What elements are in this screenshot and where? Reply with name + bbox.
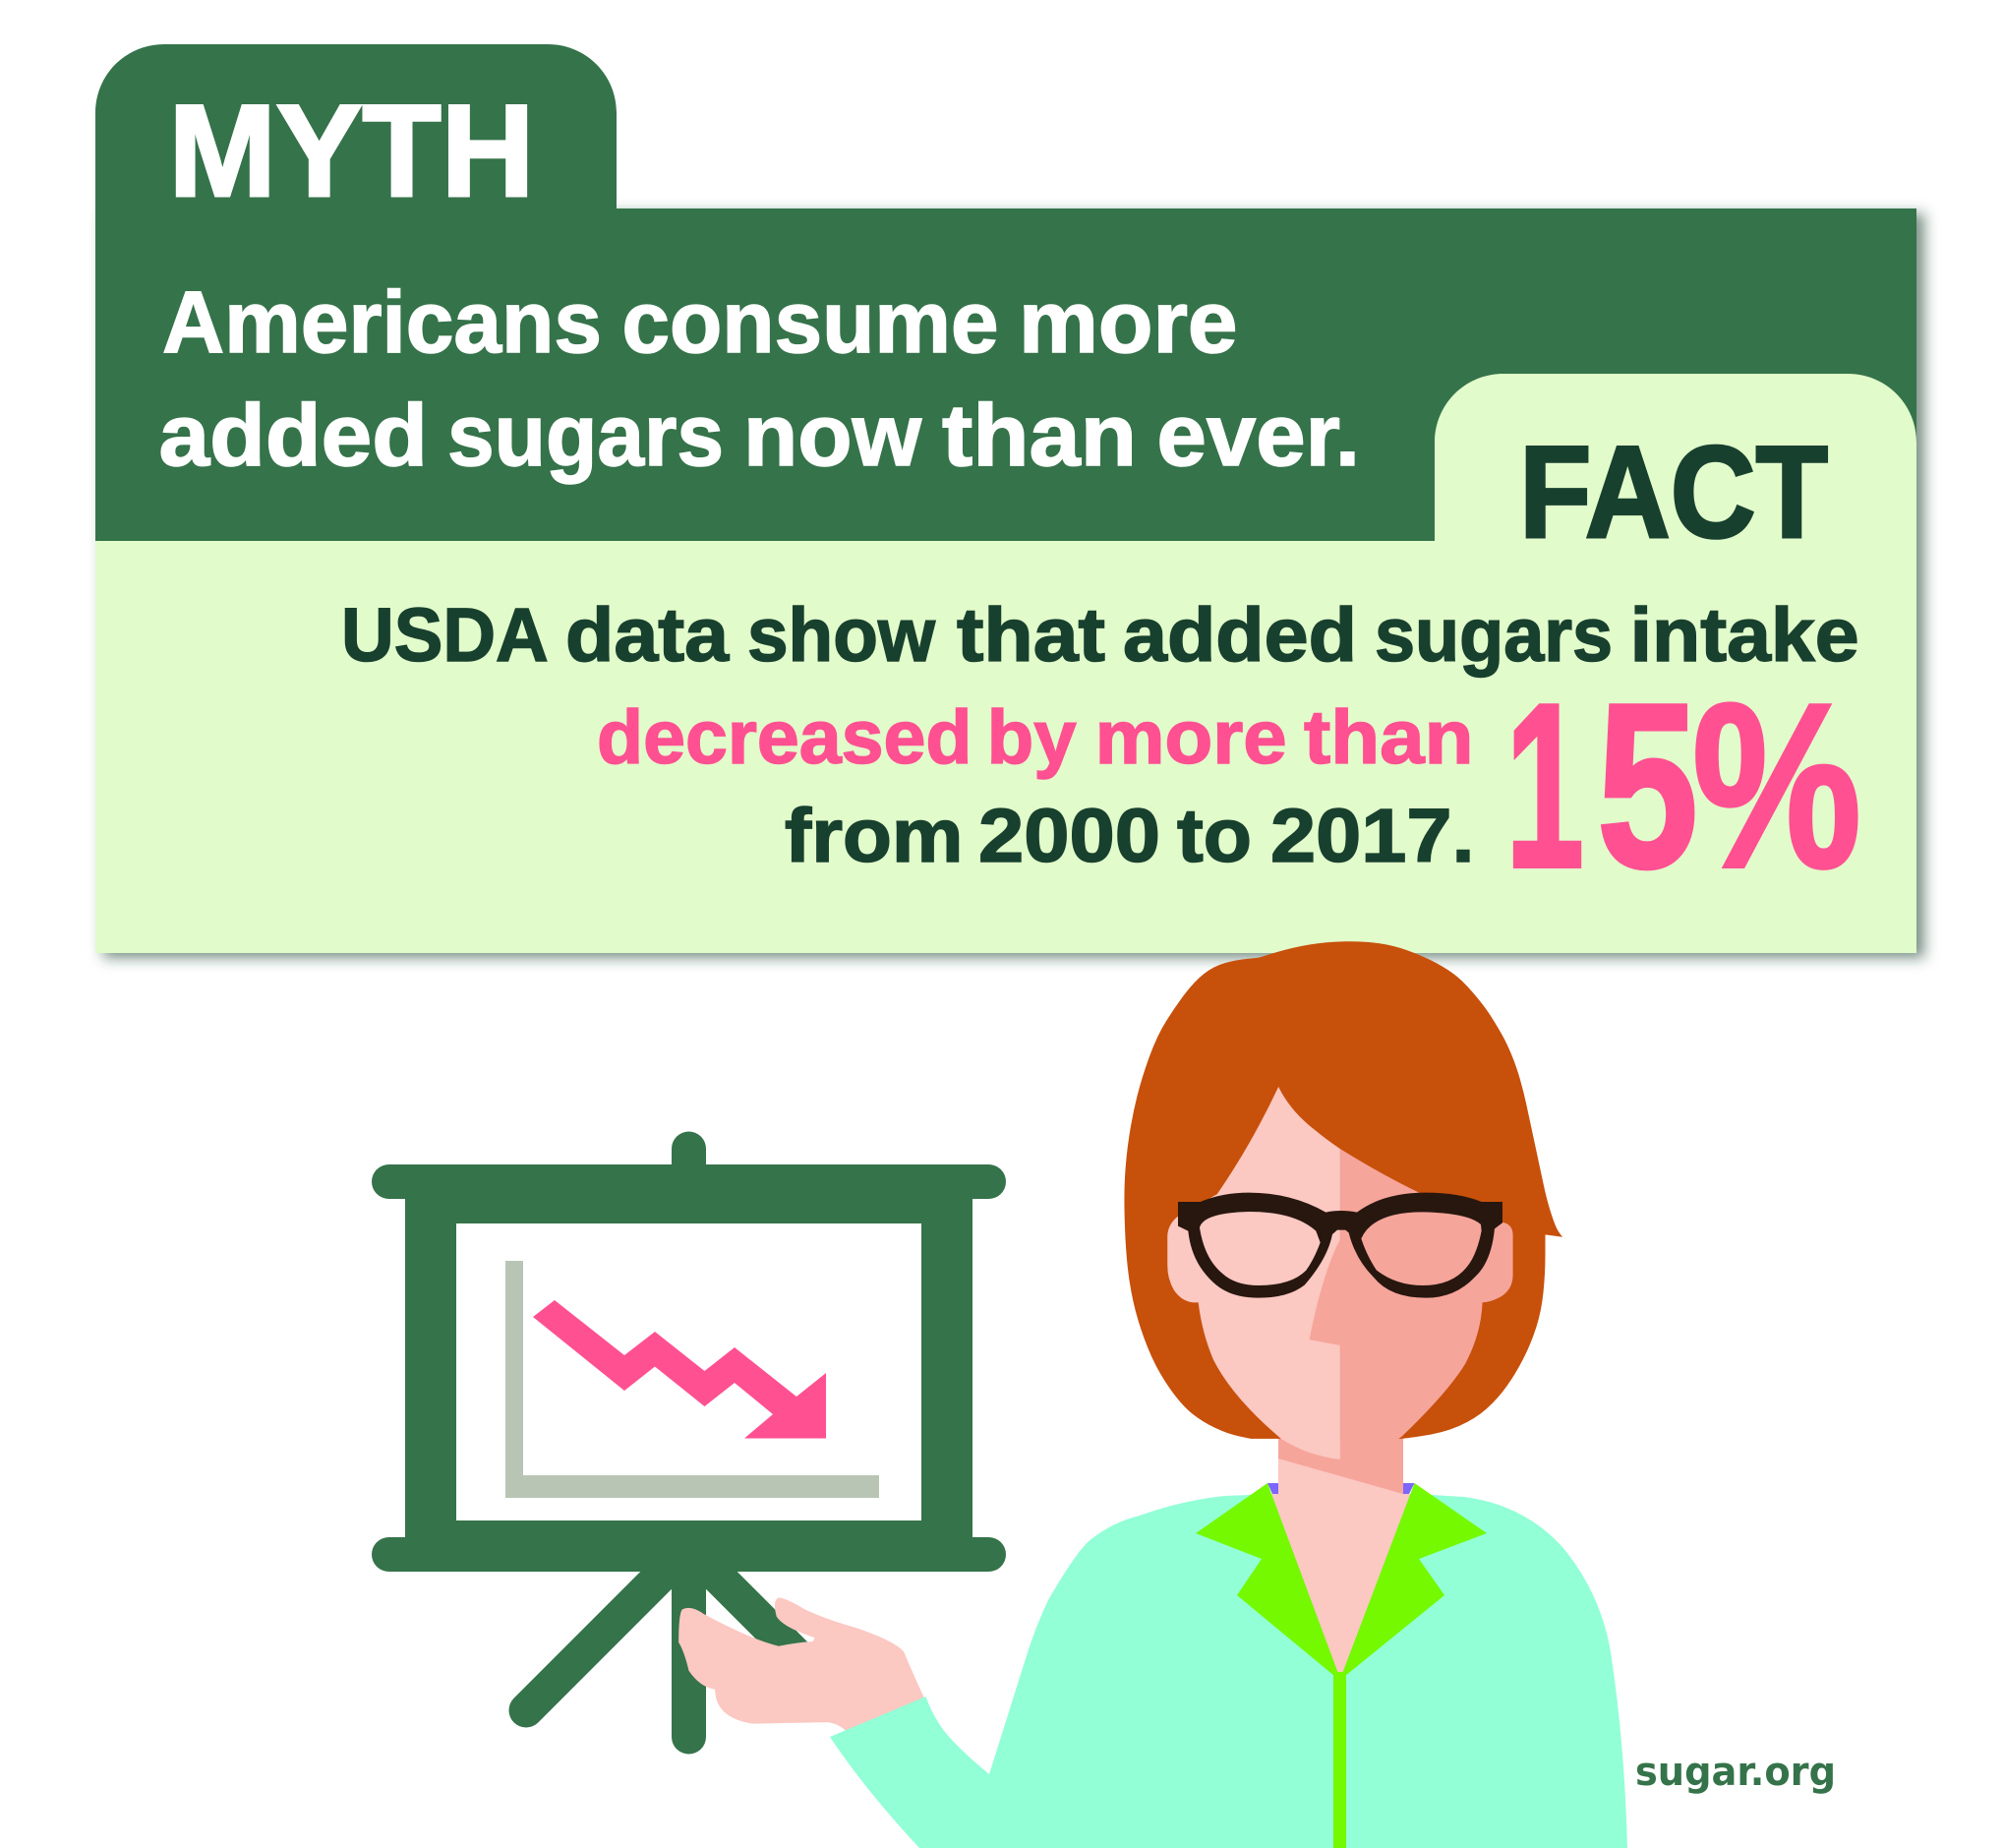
fact statement: data [565,593,730,678]
lapels [1196,1483,1487,1679]
myth statement: sugars [447,386,724,484]
panel shadow base [95,209,1916,953]
fact statement: than [1304,695,1473,780]
fact statement [341,593,1859,878]
head [1124,941,1562,1460]
face light side [1167,1087,1340,1460]
myth statement: more [1019,272,1237,371]
myth statement: now [743,386,922,484]
heading: myth: MYTH [169,79,535,224]
panel: myth and fact card [95,44,1916,953]
source: sugar.org: sugar.org [1635,1750,1836,1795]
statistic: 15 percent: 5 [1597,656,1698,917]
myth statement: added [159,386,428,484]
glasses [1178,1193,1502,1298]
chart axes [505,1261,879,1498]
fact statement: to [1177,794,1252,878]
fact statement: from [785,794,964,878]
myth statement: ever. [1156,386,1360,484]
fact statement: show [747,593,936,678]
icon: presentation easel with falling chart [372,1149,1006,1737]
neck [1278,1416,1403,1495]
fact statement: 2017. [1270,794,1475,878]
fact statement: that [957,593,1105,678]
fact statement: sugars [1375,593,1613,678]
fact statement: added [1123,593,1357,678]
statistic: 15 percent: % [1692,656,1861,917]
fact statement: by [987,695,1077,780]
shirt [830,1495,1627,1848]
fact statement: USDA [341,593,547,678]
chart arrow trending down [533,1300,826,1438]
panel: myth [95,44,1916,541]
illustration: presenter [678,941,1627,1848]
myth statement: Americans [162,272,602,371]
statistic: 15 percent: 1 [1505,656,1584,917]
heading: fact: FACT [1519,420,1828,566]
nose shadow [1310,1239,1340,1345]
shirt placket [1333,1672,1346,1848]
panel: fact [95,374,1916,953]
easel legs [526,1149,852,1737]
myth statement: consume [621,272,999,371]
collar lining [1267,1483,1414,1494]
face shaded side [1340,1149,1513,1460]
myth statement: than [942,386,1137,484]
neck highlight [1270,1459,1412,1679]
screen [456,1223,921,1520]
easel frame [405,1180,972,1554]
myth statement [159,272,1360,484]
fact statement: 2000 [978,794,1160,878]
hair [1124,941,1562,1439]
fact statement: decreased [597,695,972,780]
hand [678,1598,923,1741]
fact statement: more [1095,695,1287,780]
fact statement: intake [1630,593,1859,678]
